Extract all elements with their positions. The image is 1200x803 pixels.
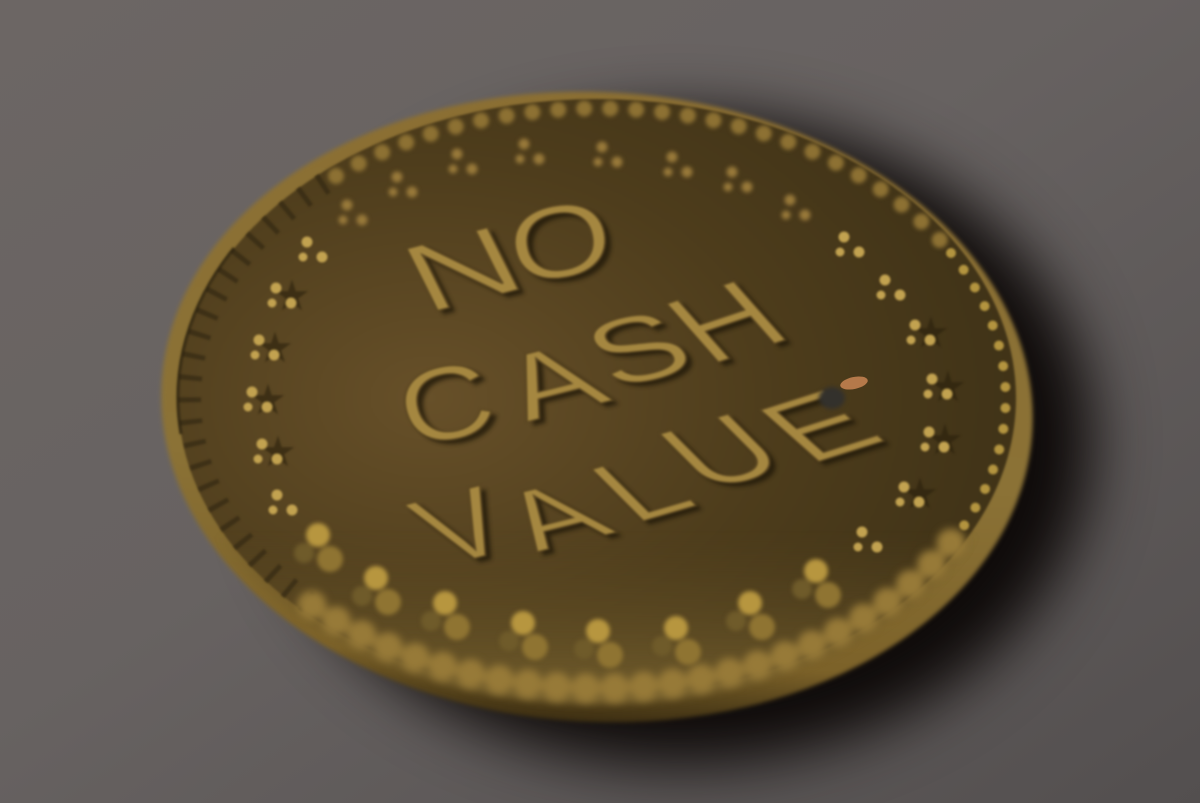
embossed lettering shadow: L [572,440,723,544]
copper chip on the E [819,374,869,409]
embossed lettering shadow: N [391,209,546,337]
star shadows: ★ [901,469,939,518]
embossed lettering: NO CASH VALUE: A [474,465,633,569]
embossed lettering: NO CASH VALUE: S [564,290,712,408]
embossed lettering: NO CASH VALUE: N [385,205,540,333]
embossed lettering shadow: S [570,294,718,412]
star shadows: ★ [259,427,297,476]
star shadows: ★ [273,271,311,320]
top beads [336,108,951,253]
coin face [178,99,1016,697]
star shadows: ★ [912,308,950,357]
right beads [951,253,1006,543]
embossed lettering: NO CASH VALUE: E [733,372,907,481]
star shadows: ★ [249,375,287,424]
embossed lettering: NO CASH VALUE [384,177,907,586]
embossed lettering: NO CASH VALUE: V [392,465,530,586]
blurred bottom star clusters [294,523,841,668]
embossed lettering: NO CASH VALUE: H [641,260,812,384]
embossed lettering: NO CASH VALUE: L [566,436,717,540]
embossed lettering shadow: A [480,469,639,573]
embossed lettering: NO CASH VALUE: O [499,177,622,308]
embossed lettering shadow: V [398,469,536,590]
embossed lettering shadow [390,181,913,590]
bottom beads [309,543,951,688]
coin outer rim [145,70,1049,744]
embossed lettering: NO CASH VALUE: U [634,395,810,509]
embossed lettering: NO CASH VALUE: C [384,337,508,470]
embossed lettering shadow: H [647,264,818,388]
embossed lettering: NO CASH VALUE: A [477,323,626,441]
left rim ticks [178,176,336,603]
coin [145,70,1049,744]
embossed lettering shadow: A [483,327,632,445]
star shadows: ★ [256,323,294,372]
side star clusters, sharp [244,232,952,552]
lower glow [172,96,1022,704]
star shadows [249,271,967,518]
embossed lettering shadow: O [505,181,628,312]
star shadows: ★ [926,415,964,464]
embossed lettering shadow: C [390,341,514,474]
embossed lettering shadow: U [640,399,816,513]
cast shadow [268,115,1092,765]
star shadows: ★ [929,362,967,411]
embossed lettering shadow: E [739,376,913,485]
upper star clusters, soft [338,138,810,226]
